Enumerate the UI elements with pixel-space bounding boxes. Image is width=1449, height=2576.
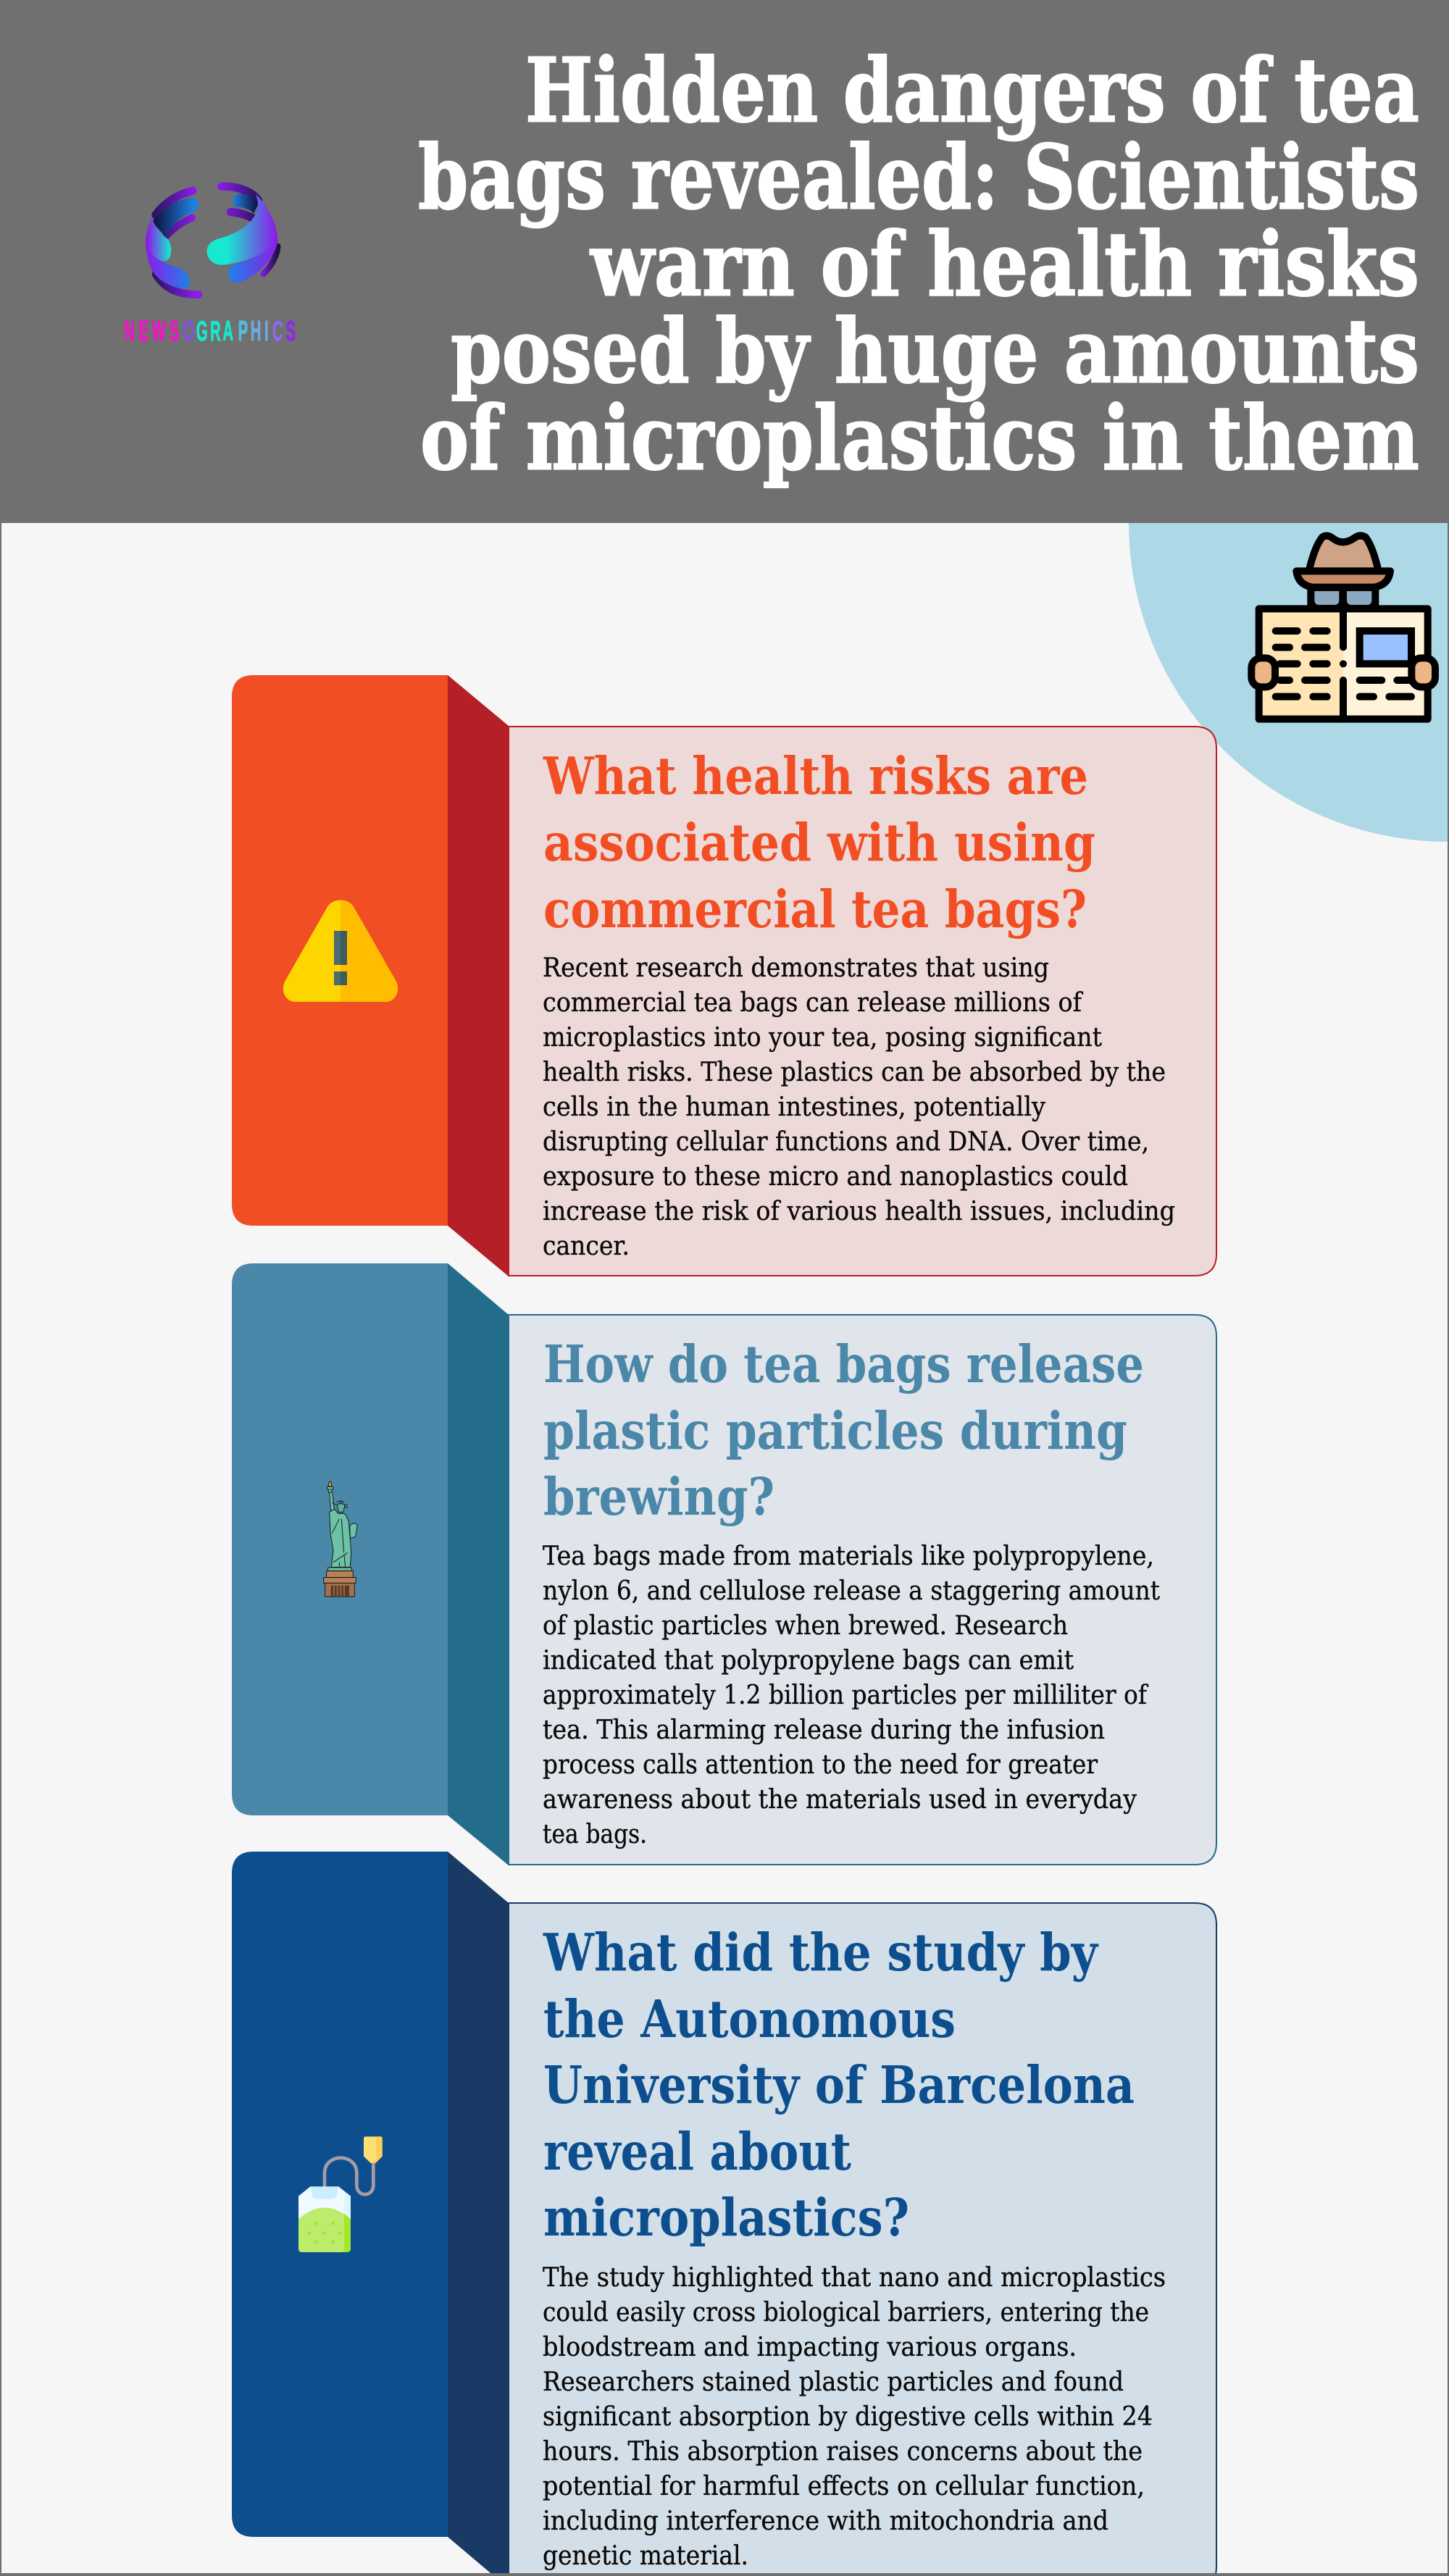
body text: commercial tea bags can release millions of xyxy=(543,988,1083,1018)
body text: increase the risk of various health issues, including xyxy=(543,1197,1175,1226)
heading: the Autonomous xyxy=(543,1989,956,2049)
icon: Statue of Liberty xyxy=(324,1481,357,1597)
body text xyxy=(543,1542,1160,1849)
body text: indicated that polypropylene bags can emit xyxy=(543,1646,1074,1676)
front face xyxy=(232,1852,448,2537)
heading: brewing? xyxy=(543,1466,774,1527)
body text xyxy=(543,953,1175,1261)
body text: Researchers stained plastic particles and found xyxy=(543,2367,1124,2397)
body text: including interference with mitochondria and xyxy=(543,2506,1108,2536)
body text: exposure to these micro and nanoplastics could xyxy=(543,1162,1128,1192)
body text: nylon 6, and cellulose release a staggering amount xyxy=(543,1576,1160,1606)
logo wordmark xyxy=(124,315,296,347)
title xyxy=(418,38,1419,490)
heading: commercial tea bags? xyxy=(543,879,1087,940)
body text: microplastics into your tea, posing significant xyxy=(543,1023,1102,1053)
logo: Newsographics xyxy=(146,186,277,295)
body text xyxy=(543,2263,1166,2571)
icon: warning triangle xyxy=(283,900,398,1002)
body text: disrupting cellular functions and DNA. Over time, xyxy=(543,1127,1149,1157)
content box xyxy=(509,1903,1216,2576)
heading xyxy=(543,1334,1144,1527)
front face xyxy=(232,1263,448,1815)
icon: detective reading newspaper xyxy=(1251,536,1435,719)
body text: awareness about the materials used in everyday xyxy=(543,1785,1137,1815)
side flap xyxy=(448,1852,509,2576)
body text: cancer. xyxy=(543,1231,630,1261)
body text: could easily cross biological barriers, entering the xyxy=(543,2298,1149,2328)
panel: plastic particle release xyxy=(232,1263,1216,1865)
body text: The study highlighted that nano and microplastics xyxy=(543,2263,1166,2293)
heading: How do tea bags release xyxy=(543,1334,1144,1394)
panel: health risks xyxy=(232,675,1216,1276)
body text: of plastic particles when brewed. Research xyxy=(543,1611,1068,1641)
panel: Barcelona study xyxy=(232,1852,1216,2576)
content box xyxy=(509,1315,1216,1865)
side flap xyxy=(448,1263,509,1865)
decorative corner circle xyxy=(1129,523,1448,842)
body text: cells in the human intestines, potentially xyxy=(543,1092,1046,1122)
heading: University of Barcelona xyxy=(543,2054,1135,2115)
heading: microplastics? xyxy=(543,2187,909,2248)
body text: process calls attention to the need for greater xyxy=(543,1750,1098,1780)
heading: What did the study by xyxy=(543,1922,1099,1983)
body text: health risks. These plastics can be absorbed by the xyxy=(543,1058,1166,1087)
logo wordmark: C xyxy=(272,315,283,347)
body text: bloodstream and impacting various organs. xyxy=(543,2333,1077,2362)
logo wordmark: P xyxy=(238,315,248,347)
body text: approximately 1.2 billion particles per milliliter of xyxy=(543,1681,1148,1710)
logo wordmark: NEWS xyxy=(124,315,179,347)
heading xyxy=(543,745,1095,940)
icon: tea bag xyxy=(298,2136,383,2252)
body text: tea bags. xyxy=(543,1820,647,1849)
body text: hours. This absorption raises concerns about the xyxy=(543,2437,1143,2467)
content box xyxy=(509,727,1216,1276)
body text: tea. This alarming release during the infusion xyxy=(543,1715,1105,1745)
body text: Tea bags made from materials like polypropylene, xyxy=(543,1542,1154,1571)
body text: genetic material. xyxy=(543,2541,748,2571)
body text: Recent research demonstrates that using xyxy=(543,953,1049,983)
heading: associated with using xyxy=(543,812,1095,873)
heading: plastic particles during xyxy=(543,1400,1127,1461)
logo wordmark: S xyxy=(286,315,296,347)
heading xyxy=(543,1922,1135,2248)
logo wordmark: GRA xyxy=(196,315,233,347)
heading: reveal about xyxy=(543,2121,851,2182)
side flap xyxy=(448,675,509,1276)
header band xyxy=(0,0,1449,523)
body text: potential for harmful effects on cellular function, xyxy=(543,2472,1145,2501)
heading: What health risks are xyxy=(543,745,1088,806)
body text: significant absorption by digestive cells within 24 xyxy=(543,2402,1153,2432)
logo wordmark: O xyxy=(183,315,195,347)
content area background xyxy=(1,523,1448,2573)
front face xyxy=(232,675,448,1226)
logo wordmark: HI xyxy=(251,315,269,347)
